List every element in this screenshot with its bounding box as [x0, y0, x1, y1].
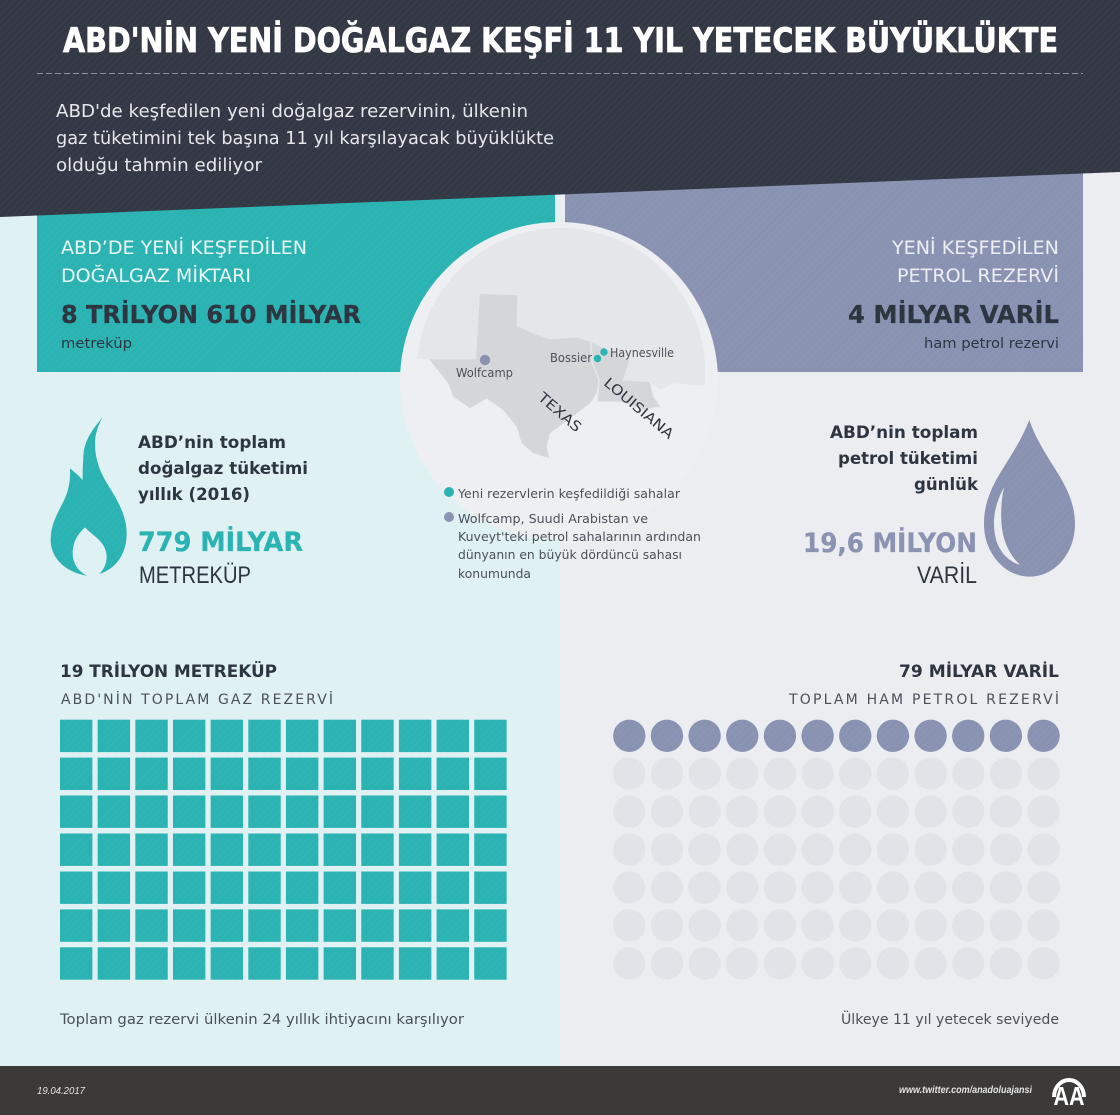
background: gas half — [0, 0, 560, 1115]
text: gas consumption label: ABD’nin toplam — [138, 433, 286, 453]
map circle — [400, 222, 718, 540]
gas reserve section — [59, 660, 507, 1028]
text: oil consumption label: günlük — [914, 475, 979, 495]
text: gas heading: ABD’DE YENİ KEŞFEDİLEN — [61, 238, 307, 259]
text: gas heading: DOĞALGAZ MİKTARI — [61, 265, 251, 287]
text: gas unit: metreküp — [61, 336, 132, 352]
text: oil consumption label — [830, 423, 979, 495]
dot grid chart — [613, 720, 1060, 980]
heading: oil reserve: 79 MİLYAR VARİL — [899, 660, 1059, 682]
label: Wolfcamp: Wolfcamp — [456, 366, 513, 380]
legend dot: Wolfcamp — [444, 512, 454, 522]
text: gas value: 8 TRİLYON 610 MİLYAR — [61, 299, 361, 329]
map: Louisiana — [591, 342, 661, 410]
marker: Wolfcamp — [480, 355, 490, 365]
oil consumption block — [803, 420, 1075, 589]
legend dot: new reserves — [444, 487, 454, 497]
map legend — [444, 486, 701, 581]
marker: Haynesville — [600, 348, 608, 356]
text: oil consumption label: ABD’nin toplam — [830, 423, 978, 443]
text: gas consumption label: yıllık (2016) — [138, 485, 250, 505]
text: gas heading — [61, 238, 307, 287]
subheading: gas reserve: ABD'NİN TOPLAM GAZ REZERVİ — [61, 690, 333, 708]
label: Texas: TEXAS — [534, 389, 584, 436]
logo: AA: AA — [1054, 1081, 1085, 1111]
legend text: new reserves: Yeni rezervlerin keşfedildiği sahalar — [457, 486, 681, 501]
label: Haynesville: Haynesville — [610, 346, 674, 360]
gas consumption block — [51, 417, 308, 589]
label: Bossier: Bossier — [550, 351, 592, 365]
intro text: olduğu tahmin ediliyor — [56, 155, 263, 176]
footer — [0, 1066, 1120, 1115]
date: 19.04.2017 — [37, 1086, 85, 1097]
text: gas consumption unit: METREKÜP — [139, 562, 251, 589]
map: Texas — [429, 294, 598, 458]
icon: flame — [51, 417, 127, 576]
note: gas reserve: Toplam gaz rezervi ülkenin 24 yıllık ihtiyacını karşılıyor — [59, 1012, 464, 1028]
legend text: Wolfcamp: dünyanın en büyük dördüncü sahası — [458, 547, 682, 562]
oil reserve section — [613, 660, 1060, 1028]
note: oil reserve: Ülkeye 11 yıl yetecek seviyede — [841, 1010, 1059, 1028]
icon: oil drop — [984, 420, 1075, 577]
legend text: Wolfcamp: Wolfcamp, Suudi Arabistan ve — [458, 511, 648, 526]
label: Louisiana: LOUISIANA — [600, 375, 677, 443]
text: oil unit: ham petrol rezervi — [924, 336, 1059, 352]
background: oil half — [560, 0, 1120, 1115]
text: oil value: 4 MİLYAR VARİL — [848, 299, 1059, 329]
source: www.twitter.com/anadoluajansi — [899, 1084, 1033, 1096]
legend text: Wolfcamp: Kuveyt'teki petrol sahalarının ardından — [458, 529, 701, 544]
intro text — [56, 101, 554, 176]
text: gas consumption label: doğalgaz tüketimi — [138, 459, 308, 479]
panel: oil reserve — [565, 150, 1083, 372]
intro text: gaz tüketimini tek başına 11 yıl karşılayacak büyüklükte — [56, 128, 554, 149]
text: oil consumption label: petrol tüketimi — [838, 449, 978, 469]
text: oil heading: PETROL REZERVİ — [897, 266, 1059, 287]
text: gas consumption value: 779 MİLYAR — [138, 526, 303, 558]
text: oil heading: YENİ KEŞFEDİLEN — [891, 238, 1059, 259]
text: oil consumption value: 19,6 MİLYON — [803, 527, 977, 559]
legend text: Wolfcamp — [458, 511, 701, 581]
square grid chart — [60, 720, 507, 980]
header band — [0, 0, 1120, 217]
legend text: Wolfcamp: konumunda — [458, 566, 531, 581]
text: gas consumption label — [138, 433, 308, 505]
subheading: oil reserve: TOPLAM HAM PETROL REZERVİ — [788, 690, 1059, 708]
heading: gas reserve: 19 TRİLYON METREKÜP — [60, 660, 277, 682]
intro text: ABD'de keşfedilen yeni doğalgaz rezervinin, ülkenin — [56, 101, 528, 122]
text: oil heading — [891, 238, 1059, 287]
panel: natural gas amount — [37, 170, 555, 372]
text: oil consumption unit: VARİL — [917, 562, 977, 589]
map: surrounding land — [417, 228, 705, 390]
marker: Bossier — [594, 355, 601, 362]
